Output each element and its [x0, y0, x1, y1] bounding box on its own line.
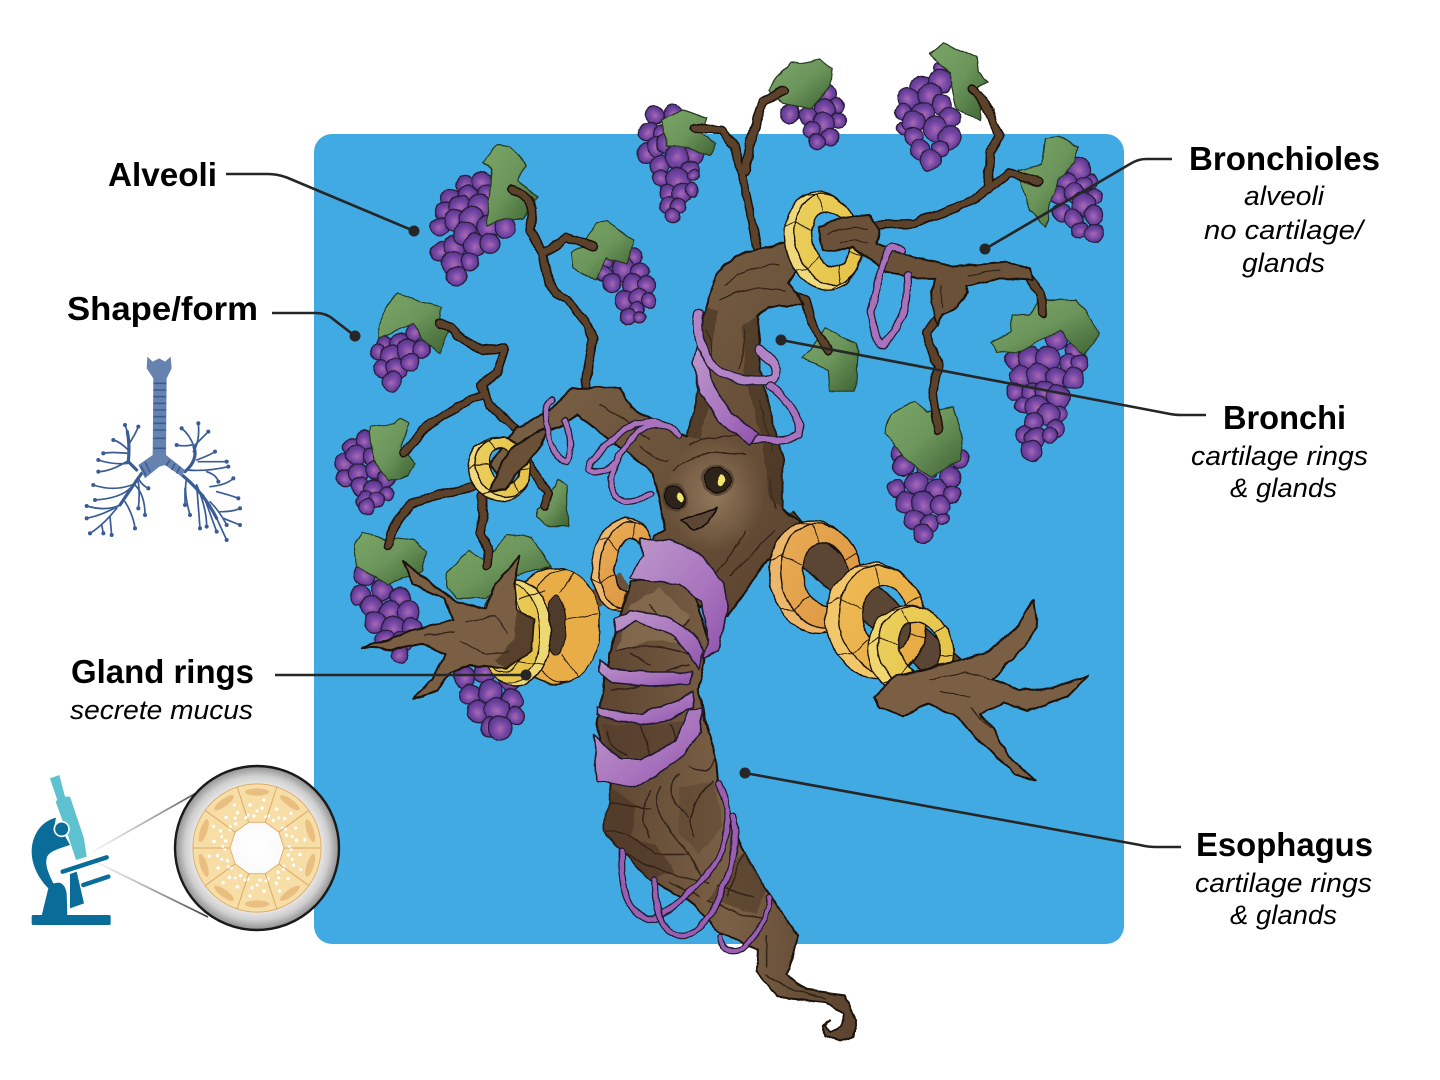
label: Gland rings: secrete mucus — [70, 695, 253, 725]
label: Esophagus — [1195, 826, 1373, 930]
label: Shape/form: Shape/form — [67, 290, 258, 327]
label: Bronchi: & glands — [1230, 473, 1337, 503]
trunk upper body with bronchi — [490, 243, 805, 616]
leader line: Bronchi — [776, 334, 1206, 415]
label: Esophagus: Esophagus — [1196, 826, 1373, 863]
leader line: Alveoli — [226, 174, 420, 236]
tree illustration — [335, 43, 1104, 1041]
icon: microscope — [32, 775, 111, 925]
grape cluster: top right — [895, 43, 987, 170]
grape cluster: upper left large — [431, 145, 537, 286]
label: Bronchioles: Bronchioles — [1189, 140, 1380, 177]
bronchial band: loop on right branch inner — [872, 247, 907, 345]
leaf: small right of trunk — [803, 327, 858, 392]
label: Bronchi: Bronchi — [1223, 399, 1346, 436]
label: Bronchioles — [1189, 140, 1380, 278]
label: Bronchioles: alveoli — [1244, 181, 1325, 211]
grape cluster: top middle — [637, 104, 717, 223]
grape cluster: right large — [990, 300, 1099, 461]
label: Gland rings — [70, 653, 254, 725]
label: Bronchi: cartilage rings — [1191, 441, 1368, 471]
bronchial band: loop on right branch — [872, 247, 907, 345]
grape cluster: left middle — [371, 293, 448, 391]
purple bands on lower trunk — [595, 539, 769, 951]
vines: bronchiole branches — [388, 90, 1043, 567]
ring: orange back gland ring — [510, 568, 600, 684]
grape cluster: upper left small — [572, 222, 656, 325]
leader line: Bronchioles — [980, 159, 1172, 254]
leaves: bottom left above hand — [355, 532, 551, 598]
left hand — [362, 556, 534, 699]
branch through small yellow ring — [490, 428, 548, 492]
face: eyes and smile — [661, 463, 735, 530]
ring: orange small left of trunk — [586, 514, 660, 614]
leaf: small lower left — [537, 480, 570, 527]
ring: yellow top right arm — [774, 183, 872, 299]
label: Esophagus: cartilage rings — [1195, 868, 1372, 898]
grape cluster: bottom left behind hand — [350, 564, 422, 662]
ring: amber middle right arm — [815, 554, 937, 688]
leader line: Shape/form — [272, 313, 360, 342]
leader line: Gland rings — [275, 670, 532, 680]
panel: blue background — [314, 134, 1124, 944]
grape cluster: right upper — [1018, 137, 1104, 242]
ring: yellow front gland ring — [480, 580, 551, 686]
right upper bronchus — [818, 215, 1033, 325]
grape cluster: below left hand — [454, 661, 523, 740]
label: Esophagus: & glands — [1230, 900, 1337, 930]
ring: orange upper right arm — [758, 512, 874, 642]
purple bands on upper trunk — [693, 313, 799, 444]
icon: lungs — [87, 357, 240, 540]
label: Alveoli: Alveoli — [108, 156, 217, 193]
label: Bronchioles: no cartilage/ — [1204, 215, 1366, 245]
right arm tube — [780, 525, 950, 672]
label: Gland rings: Gland rings — [71, 653, 254, 690]
leader line: Esophagus — [740, 768, 1181, 847]
grape cluster: top centre right — [768, 60, 846, 150]
ring: yellow lower right arm — [854, 592, 968, 710]
trunk lower with tail — [597, 577, 856, 1041]
label: Bronchioles: glands — [1242, 248, 1325, 278]
grape cluster: left lower — [335, 418, 415, 515]
left arm stub — [575, 580, 625, 612]
right hand — [873, 600, 1088, 781]
label: Bronchi — [1191, 399, 1368, 503]
ring: yellow small left branch — [456, 426, 542, 512]
purple loops on left bronchus — [546, 401, 678, 502]
magnifier lines — [92, 788, 208, 917]
grape cluster: centre bottom right — [885, 402, 969, 544]
microscope view: gland cross section — [175, 766, 339, 930]
